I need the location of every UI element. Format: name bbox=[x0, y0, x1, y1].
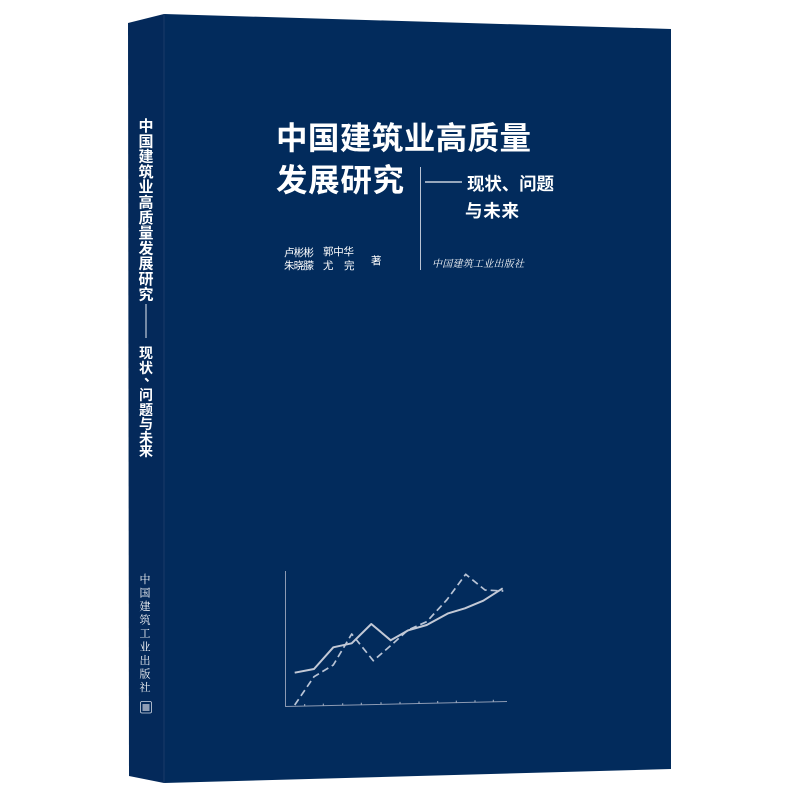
spine publisher: 版 bbox=[140, 666, 150, 680]
spine title: 质 bbox=[138, 209, 154, 227]
subtitle: 与未来 bbox=[465, 201, 520, 221]
authors bbox=[284, 245, 382, 272]
subtitle: 现状、问题 bbox=[467, 174, 554, 194]
spine publisher: 出 bbox=[140, 653, 150, 667]
dashed series bbox=[295, 574, 503, 705]
spine title: 发 bbox=[138, 239, 154, 257]
spine subtitle: 问 bbox=[139, 387, 153, 403]
spine publisher bbox=[140, 572, 150, 694]
authors: 尤 bbox=[323, 259, 334, 272]
spine title: 高 bbox=[138, 194, 154, 212]
spine title: 业 bbox=[138, 179, 154, 196]
spine title: 展 bbox=[138, 256, 154, 273]
authors: 朱晓朦 bbox=[284, 259, 314, 272]
main title bbox=[276, 120, 531, 198]
spine title bbox=[138, 118, 154, 303]
main title: 发展研究 bbox=[276, 162, 404, 198]
authors: 著 bbox=[371, 254, 382, 267]
line chart bbox=[286, 571, 507, 706]
main title: 中国建筑业高质量 bbox=[276, 120, 531, 156]
spine title: 究 bbox=[138, 285, 154, 303]
spine title: 筑 bbox=[138, 163, 154, 181]
chart axes bbox=[286, 571, 507, 706]
spine subtitle: 状 bbox=[139, 360, 153, 376]
solid series bbox=[295, 588, 503, 673]
spine subtitle: 、 bbox=[144, 368, 158, 384]
spine publisher: 业 bbox=[140, 640, 150, 654]
spine publisher: 中 bbox=[140, 572, 150, 586]
spine publisher: 国 bbox=[140, 586, 150, 600]
spine dash bbox=[145, 304, 147, 338]
book spine bbox=[128, 14, 164, 783]
spine title: 国 bbox=[138, 133, 154, 150]
authors: 完 bbox=[344, 259, 355, 272]
book front cover bbox=[164, 14, 671, 783]
spine subtitle: 现 bbox=[139, 345, 153, 361]
authors: 郭中华 bbox=[323, 245, 354, 258]
spine publisher: 筑 bbox=[140, 614, 150, 626]
spine and cover fold bbox=[163, 14, 165, 783]
spine subtitle: 与 bbox=[139, 416, 153, 432]
publisher: 中国建筑工业出版社 bbox=[432, 258, 525, 270]
authors: 卢彬彬 bbox=[284, 246, 314, 259]
spine subtitle bbox=[139, 345, 158, 459]
vertical divider bbox=[420, 167, 422, 270]
spine publisher: 工 bbox=[140, 627, 150, 640]
spine title: 量 bbox=[138, 225, 154, 242]
chart x-axis ticks bbox=[305, 700, 493, 706]
spine title: 建 bbox=[138, 148, 154, 166]
spine title: 中 bbox=[138, 118, 154, 135]
spine publisher: 社 bbox=[140, 680, 150, 694]
subtitle bbox=[425, 174, 554, 221]
spine subtitle: 来 bbox=[139, 443, 153, 459]
icon: publisher logo bbox=[140, 702, 152, 713]
spine subtitle: 题 bbox=[139, 402, 153, 418]
spine title: 研 bbox=[138, 271, 154, 288]
spine publisher: 建 bbox=[140, 599, 150, 613]
spine subtitle: 未 bbox=[139, 430, 153, 446]
